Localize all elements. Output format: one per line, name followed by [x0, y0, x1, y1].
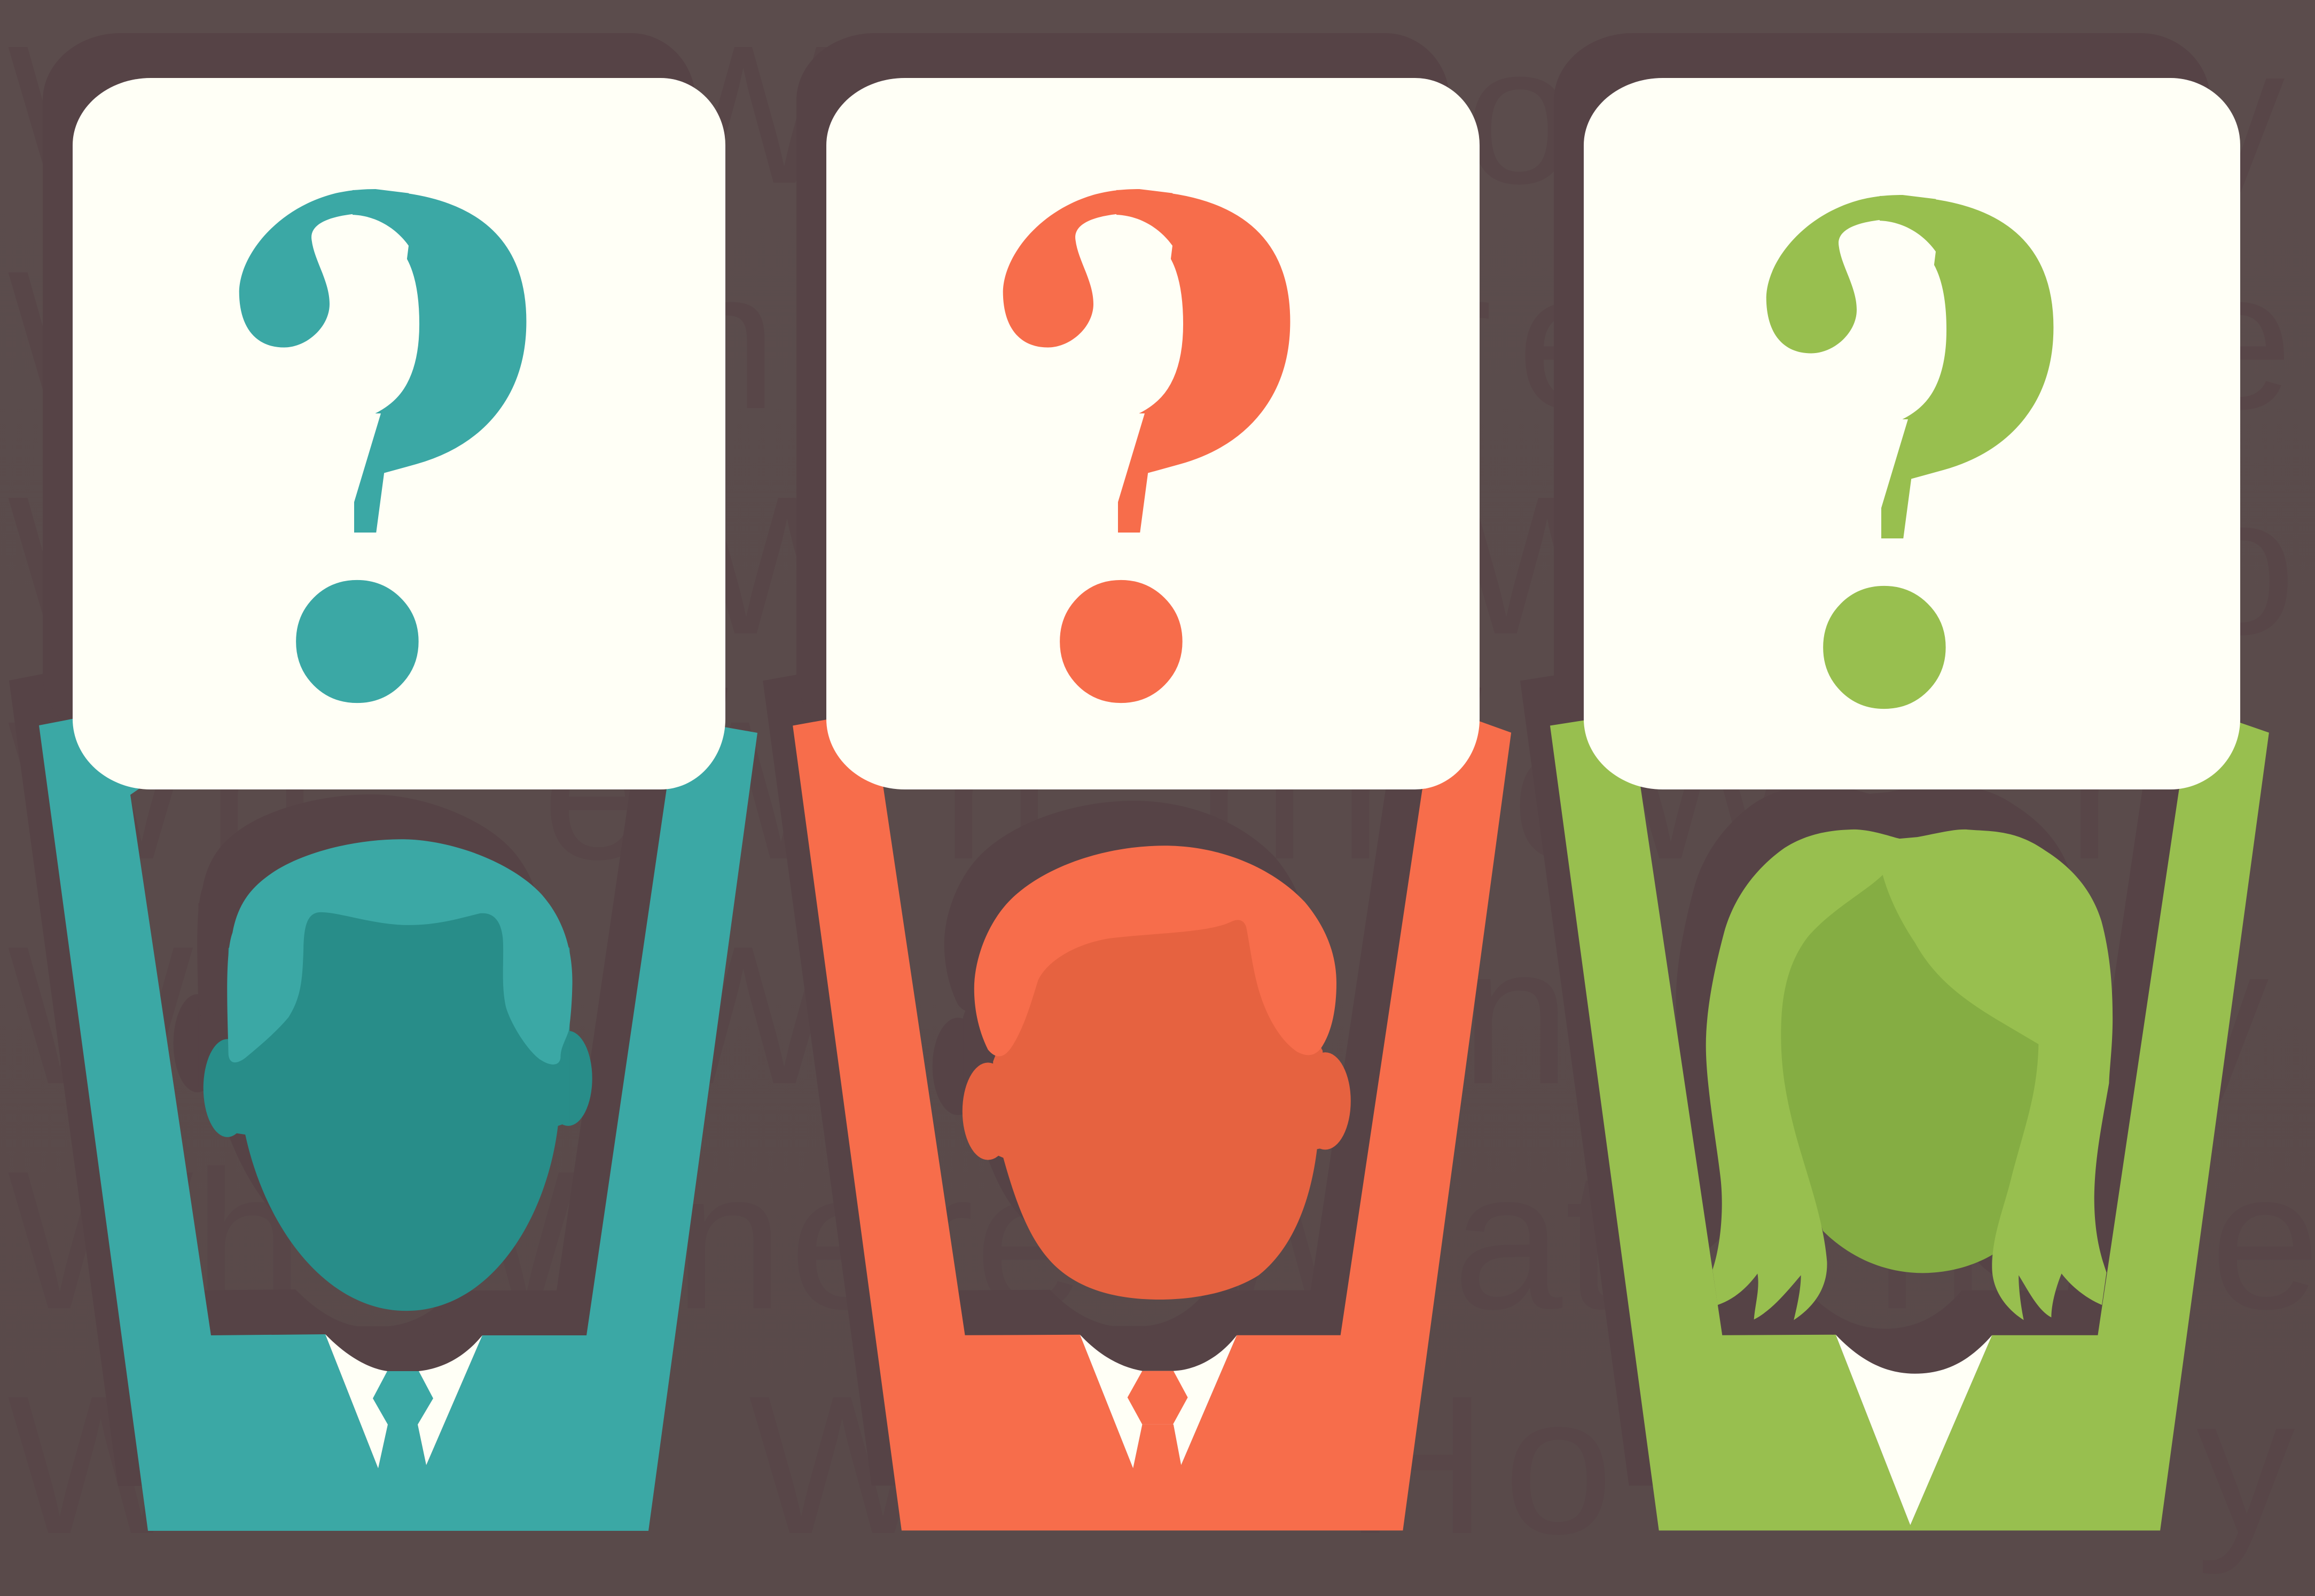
- background letters: e: [1512, 680, 1621, 901]
- icon: teal question mark: ?: [192, 17, 572, 857]
- background letters: W: [650, 905, 838, 1125]
- background letters: e: [1517, 230, 1626, 450]
- background letters: W: [749, 1355, 937, 1575]
- background letters: W: [647, 680, 835, 901]
- background letters: W: [7, 5, 195, 225]
- background letters: e: [2183, 230, 2293, 450]
- background letters: o: [2186, 456, 2296, 676]
- background letters: n: [1196, 680, 1306, 901]
- background letters: h: [194, 1130, 303, 1350]
- background letters: W: [7, 1355, 195, 1575]
- background letters: W: [7, 230, 195, 450]
- background letters: o: [1504, 1355, 1613, 1575]
- background letters: n: [1338, 680, 1448, 901]
- background letters: W: [393, 1130, 581, 1350]
- background letters: n: [674, 1130, 784, 1350]
- background letters: y: [2196, 1355, 2295, 1576]
- background letters: W: [7, 456, 195, 676]
- background letters: H: [1345, 1355, 1487, 1575]
- background letters: e: [792, 230, 901, 450]
- background letters: e: [975, 1130, 1084, 1350]
- background letters: o: [1465, 5, 1574, 225]
- icon: green question mark: ?: [1719, 23, 2099, 863]
- icon: orange question mark: ?: [956, 17, 1335, 857]
- background letters: n: [207, 680, 316, 901]
- panel: orange figure: [793, 17, 1511, 1530]
- background letters: W: [1454, 456, 1642, 676]
- background letters: W: [650, 5, 838, 225]
- background letters: n: [2067, 680, 2177, 901]
- background letters: W: [7, 680, 195, 901]
- background letters: t: [1565, 1130, 1621, 1350]
- background letters: a: [1453, 1130, 1564, 1350]
- background letters: y: [2186, 5, 2285, 226]
- background letters: n: [1461, 905, 1570, 1125]
- background letters: r: [1426, 230, 1492, 450]
- panel: teal figure: [39, 17, 757, 1531]
- background letters: W: [7, 1130, 195, 1350]
- background letters: r: [908, 1130, 974, 1350]
- background letters: n: [941, 680, 1051, 901]
- background letters: n: [1875, 1130, 1984, 1350]
- background letters: W: [7, 905, 195, 1125]
- background letters: e: [542, 680, 652, 901]
- background letters: n: [668, 230, 777, 450]
- background letters: W: [1618, 680, 1806, 901]
- panel: green figure: [1550, 23, 2269, 1530]
- background letters: e: [789, 1130, 899, 1350]
- background letters: W: [694, 456, 882, 676]
- background letters: W: [1186, 1130, 1374, 1350]
- background letters: y: [2170, 905, 2269, 1126]
